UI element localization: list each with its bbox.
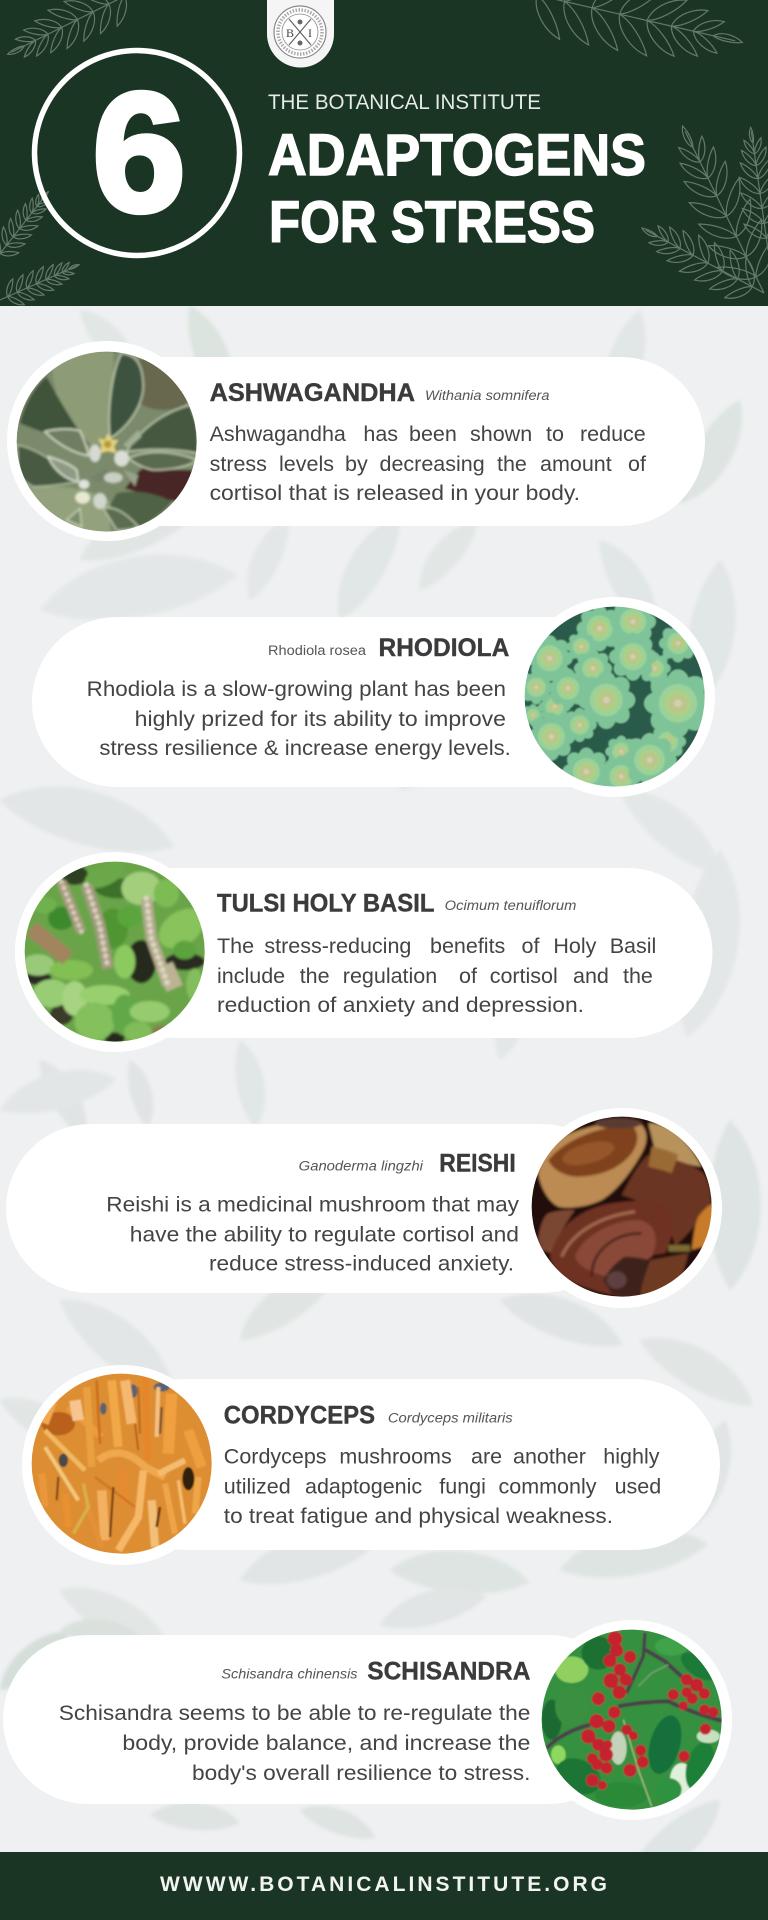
card pill (32, 617, 657, 787)
heading: REISHI (439, 1150, 516, 1178)
body text: stress-reducing (264, 934, 411, 958)
body text (210, 422, 646, 505)
photo: schisandra berries (542, 1630, 722, 1810)
body text: shown (470, 422, 532, 446)
photo ring (532, 1620, 732, 1820)
body text (87, 677, 511, 760)
card pill (80, 357, 705, 526)
body text: and (573, 964, 609, 988)
heading: RHODIOLA (378, 634, 509, 662)
body text: another (513, 1444, 586, 1468)
body text: commonly (498, 1474, 597, 1498)
body text: levels (279, 452, 334, 476)
body text (217, 934, 656, 1017)
photo: holy basil (24, 862, 205, 1042)
body text: body's overall resilience to stress. (192, 1761, 530, 1785)
body text: Holy (553, 934, 597, 958)
logo badge: B (286, 26, 294, 40)
card pill (6, 1124, 626, 1293)
body text: of (628, 452, 646, 476)
latin name: Ocimum tenuiflorum (445, 898, 576, 913)
heading: ASHWAGANDHA (210, 379, 415, 407)
body text (106, 1193, 519, 1276)
photo: ashwagandha plant (16, 352, 197, 532)
body text: utilized (224, 1474, 291, 1498)
body text: decreasing (380, 452, 485, 476)
heading: TULSI HOLY BASIL (217, 890, 434, 918)
photo ring (522, 1108, 722, 1308)
latin name: Withania somnifera (425, 388, 550, 403)
body text: body, provide balance, and increase the (122, 1731, 530, 1755)
card pill (100, 1379, 720, 1550)
card pill (3, 1635, 633, 1804)
eyebrow: THE BOTANICAL INSTITUTE (268, 90, 541, 114)
body text: Basil (610, 934, 656, 958)
photo ring (7, 341, 207, 541)
body text: cortisol (490, 964, 558, 988)
panel: cordyceps (22, 1365, 720, 1565)
number badge: 6: 6 (92, 58, 186, 248)
body text: cortisol that is released in your body. (210, 481, 580, 505)
footer band (0, 1852, 768, 1920)
panel: reishi (6, 1108, 722, 1308)
body text: the (623, 964, 653, 988)
body text: of (522, 934, 539, 958)
body text: reduce stress-induced anxiety. (209, 1252, 514, 1276)
panel: tulsi holy basil (15, 852, 712, 1052)
body text: to (546, 422, 564, 446)
latin name: Rhodiola rosea (268, 643, 367, 658)
body text: Ashwagandha (210, 422, 346, 446)
headline line 2: FOR STRESS (269, 190, 595, 255)
body text (224, 1444, 661, 1528)
body text: regulation (343, 964, 437, 988)
body text: reduce (580, 422, 646, 446)
header fern decorations (0, 0, 768, 316)
body text: benefits (430, 934, 505, 958)
body text: highly (603, 1444, 660, 1468)
body text: adaptogenic (305, 1474, 422, 1498)
photo: cordyceps strands (32, 1374, 212, 1554)
body text: fungi (439, 1474, 486, 1498)
headline line 1: ADAPTOGENS (268, 123, 646, 188)
body text: are (471, 1444, 502, 1468)
footer url: WWWW.BOTANICALINSTITUTE.ORG (160, 1873, 607, 1896)
body text: the (300, 964, 330, 988)
heading: SCHISANDRA (367, 1658, 530, 1686)
body text: to treat fatigue and physical weakness. (224, 1504, 613, 1528)
body text: The (217, 934, 254, 958)
body text: by (345, 452, 368, 476)
photo: rhodiola rosettes (524, 606, 705, 787)
logo badge: I (308, 26, 312, 40)
body text: used (615, 1474, 661, 1498)
body text: of (459, 964, 477, 988)
header band (0, 0, 768, 306)
number badge: 6 (34, 50, 240, 256)
photo ring (15, 852, 215, 1052)
body text: Cordyceps (224, 1444, 327, 1468)
body text: has (363, 422, 398, 446)
body text: amount (540, 452, 612, 476)
title block (268, 90, 646, 255)
body text: stress resilience & increase energy levels. (99, 736, 511, 760)
body text: Reishi is a medicinal mushroom that may (106, 1193, 519, 1217)
body text: highly prized for its ability to improve (135, 707, 506, 731)
body text: the (497, 452, 527, 476)
logo badge (267, 0, 334, 68)
panel: schisandra (3, 1620, 732, 1820)
latin name: Cordyceps militaris (388, 1411, 513, 1426)
panel: rhodiola (32, 597, 715, 798)
body text: Schisandra seems to be able to re-regulate the (59, 1701, 530, 1725)
body text: stress (210, 452, 267, 476)
photo: reishi mushrooms (532, 1116, 712, 1297)
latin name: Schisandra chinensis (221, 1667, 358, 1682)
body text: mushrooms (339, 1444, 452, 1468)
body text: include (217, 964, 285, 988)
body text: have the ability to regulate cortisol and (130, 1223, 519, 1247)
photo ring (22, 1365, 222, 1565)
body text (59, 1701, 530, 1785)
latin name: Ganoderma lingzhi (299, 1159, 424, 1174)
body text: Rhodiola is a slow-growing plant has been (87, 677, 506, 701)
photo ring (515, 597, 715, 797)
body text: reduction of anxiety and depression. (217, 993, 584, 1017)
card pill (90, 868, 712, 1038)
panel: ashwagandha (7, 341, 705, 541)
body text: been (409, 422, 457, 446)
heading: CORDYCEPS (224, 1401, 375, 1429)
